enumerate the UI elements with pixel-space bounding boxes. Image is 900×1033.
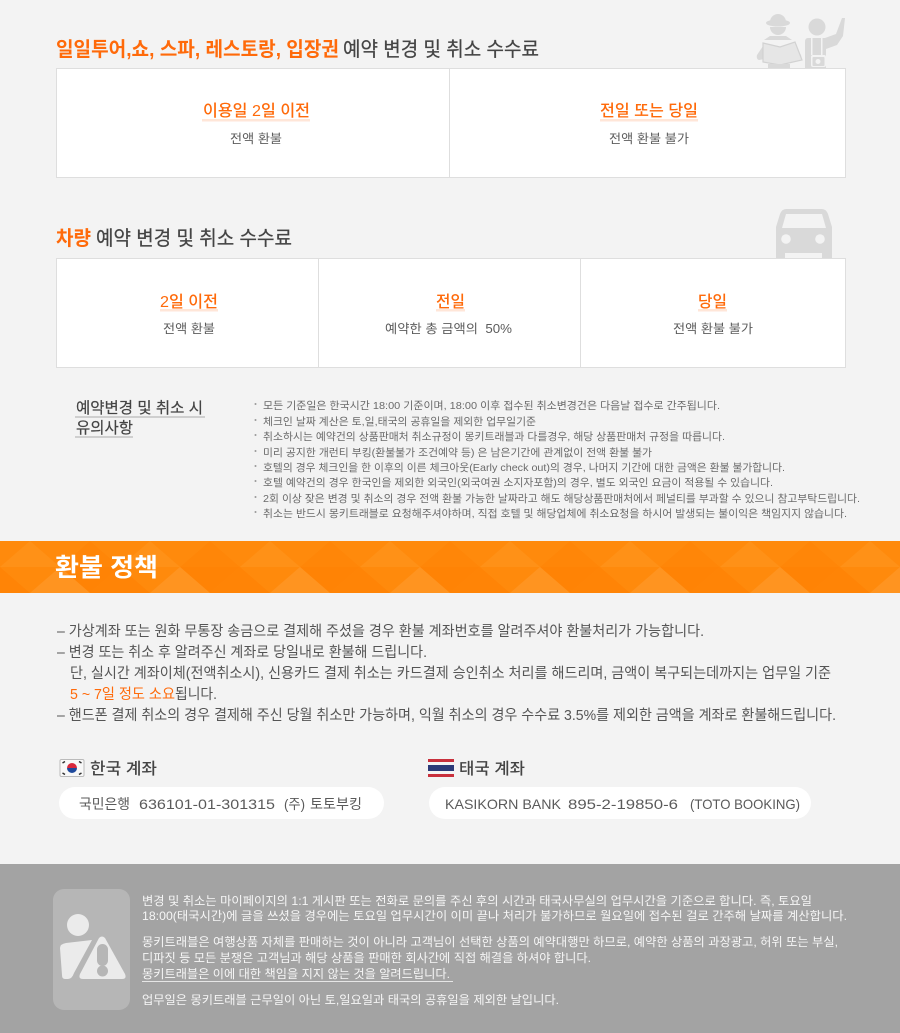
text block: refund rules: – 가상계좌 또는 원화 무통장 송금으로 결제해 주셨을 경우 환불 계좌번호를 알려주셔야 환불처리가 가능합니다. — [57, 623, 704, 640]
cell: day before — [385, 293, 512, 336]
heading: cautions: 유의사항 — [76, 419, 133, 437]
cell: day before: 전일 — [436, 293, 465, 311]
account pill: 국민은행 — [79, 796, 130, 812]
icon: travellers — [757, 14, 845, 69]
banner: refund policy — [0, 541, 900, 593]
cell: day before or same day: 전액 환불 불가 — [609, 132, 690, 146]
cell: day before or same day — [600, 102, 698, 146]
heading: cautions — [75, 399, 205, 438]
text block: caution list: 2회 이상 잦은 변경 및 취소의 경우 전액 환불 가능한 날짜라고 해도 해당상품판매처에서 페널티를 부과할 수 있으니 참고부탁드립니다. — [263, 492, 860, 505]
account pill: KASIKORN BANK — [445, 796, 562, 812]
text block: refund rules — [57, 623, 836, 724]
footer text: 업무일은 몽키트래블 근무일이 아닌 토,일요일과 태국의 공휴일을 제외한 날입니다. — [142, 993, 559, 1007]
text block: caution list: 호텔의 경우 체크인을 한 이후의 이른 체크아웃(Early check out)의 경우, 나머지 기간에 대한 금액은 환불 불가합니다. — [263, 461, 785, 474]
heading: tours refund fees — [56, 38, 539, 61]
footer text — [142, 894, 847, 1007]
icon: korean flag — [60, 760, 84, 776]
icon: thai flag — [428, 759, 454, 777]
account pill: (TOTO BOOKING) — [690, 796, 800, 812]
footer text: 몽키트래블은 여행상품 자체를 판매하는 것이 아니라 고객님이 선택한 상품의 예약대행만 하므로, 예약한 상품의 과장광고, 허위 또는 부실, — [142, 934, 838, 949]
cell: same day: 당일 — [698, 293, 727, 311]
text block: refund rules: 단, 실시간 계좌이체(전액취소시), 신용카드 결제 취소는 카드결제 승인취소 처리를 해드리며, 금액이 복구되는데까지는 업무일 기준 — [70, 665, 831, 682]
account heading: 태국 계좌 — [459, 760, 525, 778]
heading: tours refund fees: 일일투어,쇼, 스파, 레스토랑, 입장권 — [56, 38, 339, 61]
account pill: 토토부킹 — [310, 796, 362, 812]
text block: refund rules: 됩니다. — [175, 686, 217, 703]
text block: caution list: 호텔 예약건의 경우 한국인을 제외한 외국인(외국여권 소지자포함)의 경우, 별도 외국인 요금이 적용될 수 있습니다. — [263, 476, 773, 489]
text block: caution list — [254, 399, 860, 520]
heading: car fees: 예약 변경 및 취소 수수료 — [96, 227, 292, 250]
korea account — [59, 760, 384, 819]
account pill — [429, 787, 811, 819]
thailand account — [428, 759, 811, 819]
account pill — [59, 787, 384, 819]
account pill: (주) — [284, 796, 305, 812]
panel: tours fee table — [56, 68, 846, 178]
cell: two days before: 전액 환불 — [163, 322, 215, 336]
panel: footer notice — [0, 864, 900, 1033]
cell: two days before: 전액 환불 — [230, 132, 282, 146]
cell: two days before — [202, 102, 310, 146]
icon: person with warning — [53, 889, 130, 1010]
cell: same day: 전액 환불 불가 — [673, 322, 754, 336]
footer text: 18:00(태국시간)에 글을 쓰셨을 경우에는 토요일 업무시간이 이미 끝나 처리가 불가하므로 월요일에 접수된 걸로 간주해 날짜를 계산합니다. — [142, 909, 847, 923]
text block: refund rules: 5 ~ 7일 정도 소요 — [70, 686, 175, 703]
banner title: 환불 정책 — [55, 554, 158, 582]
text block: caution list: 체크인 날짜 계산은 토,일,태국의 공휴일을 제외한 업무일기준 — [263, 415, 536, 428]
cell: same day — [673, 293, 754, 336]
heading: car fees: 차량 — [56, 227, 91, 250]
cell: two days before — [160, 293, 218, 336]
cell: day before: 예약한 총 금액의 50% — [385, 321, 512, 336]
cell: two days before: 2일 이전 — [160, 293, 218, 311]
text block: caution list: 미리 공지한 개런티 부킹(환불불가 조건예약 등) 은 남은기간에 관계없이 전액 환불 불가 — [263, 446, 652, 459]
heading: tours refund fees: 예약 변경 및 취소 수수료 — [343, 38, 539, 61]
text block: caution list: 취소는 반드시 몽키트래블로 요청해주셔야하며, 직접 호텔 및 해당업체에 취소요청을 하시어 발생되는 불이익은 책임지지 않습니다. — [263, 507, 847, 520]
footer text: 변경 및 취소는 마이페이지의 1:1 게시판 또는 전화로 문의를 주신 후의 시간과 태국사무실의 업무시간을 기준으로 합니다. 즉, 토요일 — [142, 894, 812, 908]
footer text: 몽키트래블은 이에 대한 책임을 지지 않는 것을 알려드립니다. — [142, 966, 450, 981]
footer text: 디파짓 등 모든 분쟁은 고객님과 해당 상품을 판매한 회사간에 직접 해결을 하셔야 합니다. — [142, 951, 591, 965]
cell: two days before: 이용일 2일 이전 — [203, 102, 310, 120]
cell: day before or same day: 전일 또는 당일 — [600, 102, 698, 120]
account pill: 636101-01-301315 — [139, 796, 275, 812]
account pill: 895-2-19850-6 — [568, 796, 678, 812]
text block: refund rules: – 변경 또는 취소 후 알려주신 계좌로 당일내로 환불해 드립니다. — [57, 644, 427, 661]
heading: cautions: 예약변경 및 취소 시 — [76, 399, 203, 417]
account heading: 한국 계좌 — [90, 760, 157, 778]
text block: caution list: 모든 기준일은 한국시간 18:00 기준이며, 18:00 이후 접수된 취소변경건은 다음날 접수로 간주됩니다. — [263, 399, 720, 412]
text block: caution list: 취소하시는 예약건의 상품판매처 취소규정이 몽키트래블과 다를경우, 해당 상품판매처 규정을 따릅니다. — [263, 430, 725, 443]
icon: car — [776, 209, 832, 258]
panel: car fee table — [56, 258, 846, 368]
text block: refund rules: – 핸드폰 결제 취소의 경우 결제해 주신 당월 취소만 가능하며, 익월 취소의 경우 수수료 3.5%를 제외한 금액을 계좌로 환불해드립니다. — [57, 707, 836, 724]
